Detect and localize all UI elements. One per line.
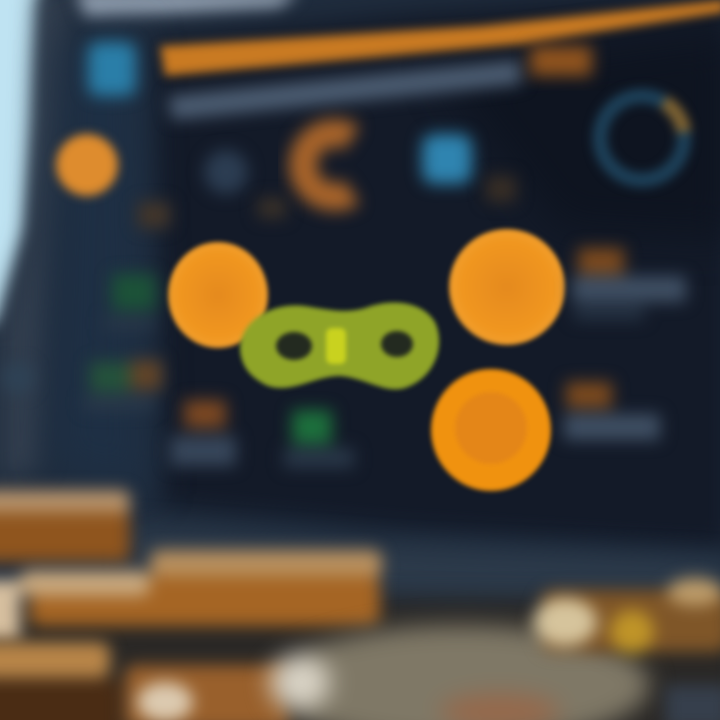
icon: blue square top left xyxy=(88,42,136,96)
coin stack: lower left xyxy=(0,642,290,720)
bottom orange stat xyxy=(170,400,236,466)
icon: blue square centre xyxy=(422,134,472,184)
coin stack: middle xyxy=(0,550,382,640)
bottom dark foreground xyxy=(0,600,720,720)
coin stack: silver front xyxy=(270,625,650,720)
right label two xyxy=(564,382,660,440)
orange subtitle tag xyxy=(530,46,592,76)
window light at left xyxy=(0,0,42,330)
large orange coin left xyxy=(168,242,268,348)
bottom green stat xyxy=(284,410,354,468)
green chain link connector xyxy=(240,303,439,389)
icon: faint grey circle xyxy=(204,150,248,194)
left green labels xyxy=(84,274,162,410)
donut chart xyxy=(600,96,684,180)
dashboard screen xyxy=(150,0,720,548)
coin stack: left top xyxy=(0,490,130,562)
icon: small orange circle xyxy=(56,134,118,196)
icon: orange crescent xyxy=(303,133,352,197)
left screen edge panel xyxy=(50,30,150,495)
right label one xyxy=(572,248,686,320)
top light strip xyxy=(75,0,300,18)
monitor lower bezel xyxy=(130,525,720,610)
small muted labels row xyxy=(138,176,516,228)
grey side frame xyxy=(0,0,70,480)
large orange coin bottom right xyxy=(431,369,551,491)
dark upper right area xyxy=(440,30,720,240)
coin stack: right gold xyxy=(533,578,720,720)
large orange coin top right xyxy=(449,229,565,345)
left edge small icon xyxy=(2,362,34,394)
grey subtitle bar xyxy=(168,60,522,120)
orange title bar xyxy=(160,0,720,76)
